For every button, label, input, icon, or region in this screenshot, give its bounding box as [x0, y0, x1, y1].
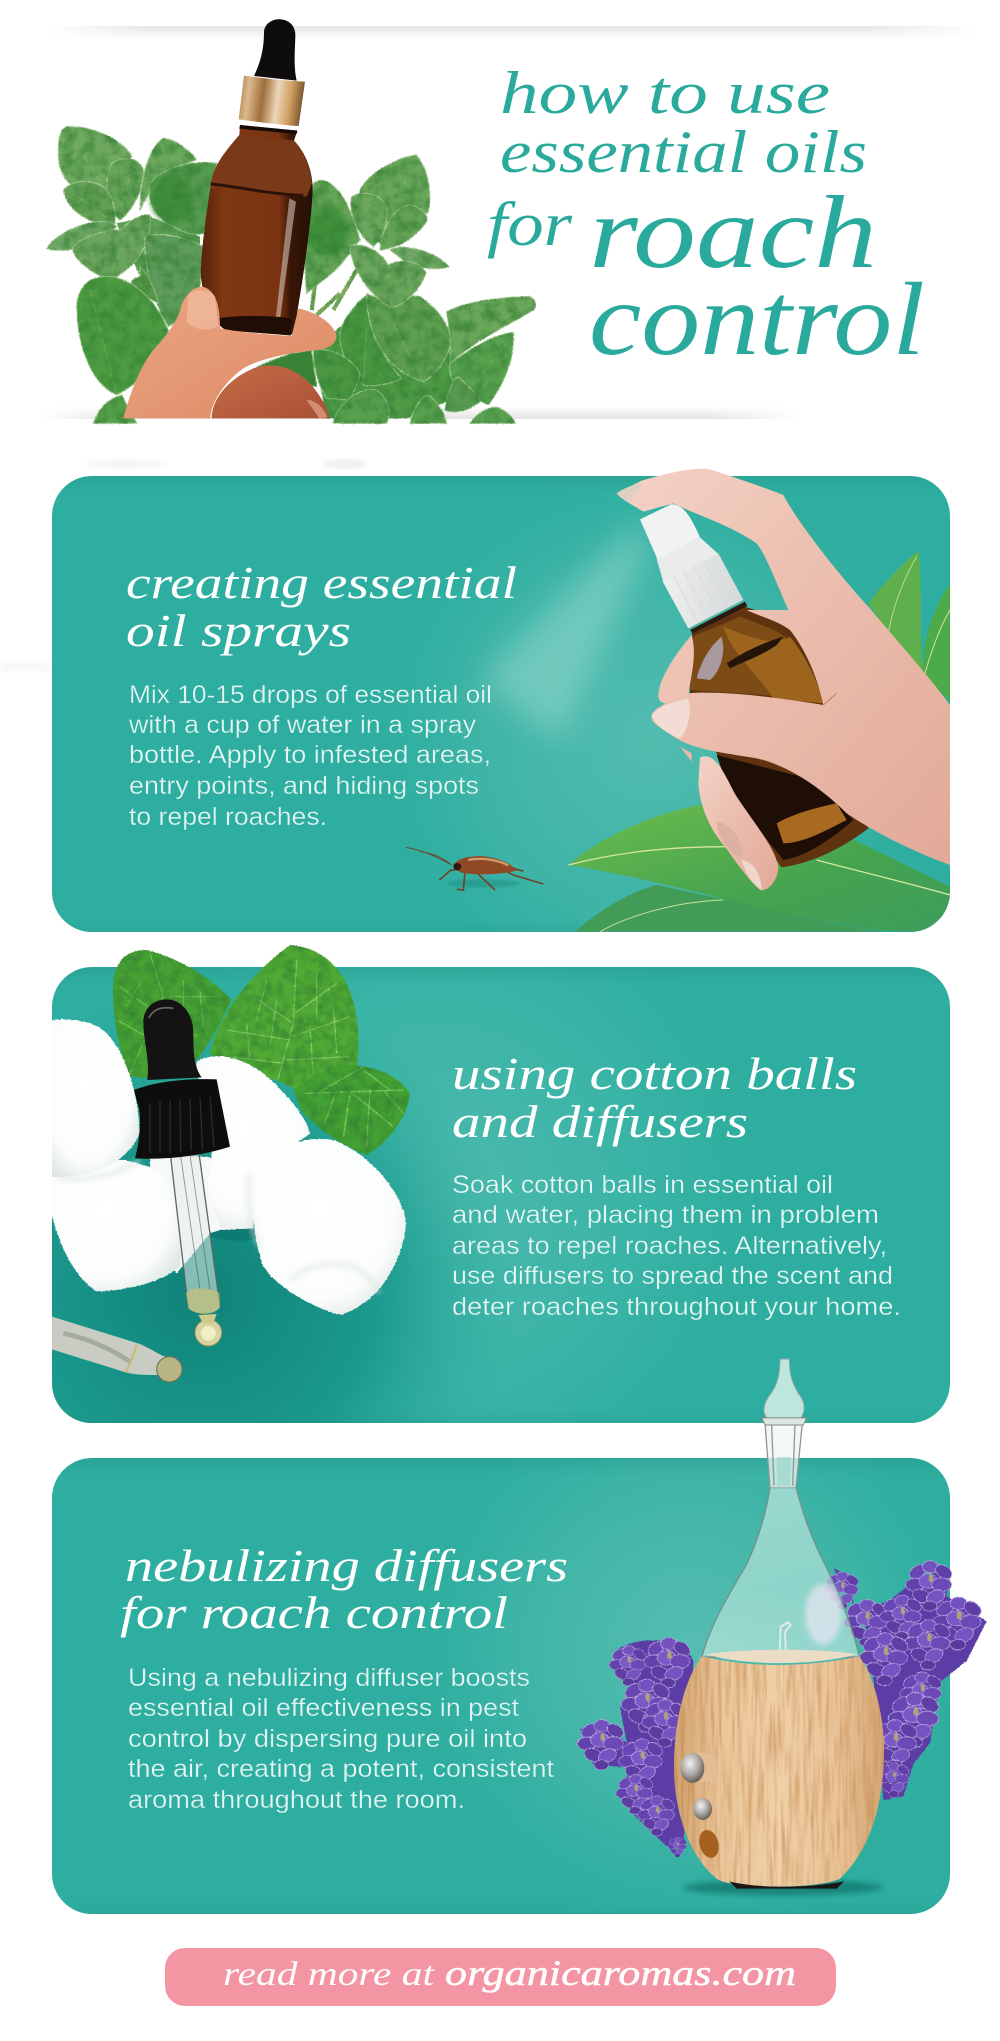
hand [123, 287, 336, 418]
base shadow [683, 1880, 883, 1895]
body text: aroma throughout the room. [128, 1786, 465, 1814]
dial knob [680, 1753, 717, 1783]
amber spray bottle [690, 602, 868, 867]
body text: the air, creating a potent, consistent [128, 1755, 554, 1783]
heading: using cotton balls [452, 1048, 857, 1099]
spray bottle in hand [617, 469, 950, 890]
glass vessel [702, 1359, 859, 1657]
glass tube [171, 1153, 220, 1313]
call to action button [165, 1948, 836, 2006]
footer text: organicaromas.com [445, 1953, 796, 1993]
body text: areas to repel roaches. Alternatively, [452, 1232, 887, 1260]
dropper bulb [254, 19, 297, 81]
button [693, 1798, 712, 1820]
heading: oil sprays [126, 605, 351, 656]
spray mist [480, 520, 650, 740]
black ribbed cap [134, 1079, 230, 1159]
footer text: read more at [223, 1956, 436, 1993]
gold collar [239, 76, 305, 126]
heading [452, 1048, 857, 1147]
vent hole [696, 1827, 722, 1861]
panel background [52, 967, 950, 1423]
heading [120, 1540, 568, 1638]
title [487, 60, 925, 377]
white spray pump [640, 504, 743, 628]
footer text [223, 1953, 796, 1993]
title: for [487, 191, 573, 259]
body text [452, 1171, 901, 1321]
body text: Using a nebulizing diffuser boosts [128, 1664, 530, 1692]
header illustration: oregano leaves, amber bottle and hand [47, 19, 536, 423]
body text: entry points, and hiding spots [129, 772, 479, 800]
body text: Mix 10-15 drops of essential oil [129, 681, 492, 709]
heading: creating essential [126, 557, 517, 608]
panel: creating essential oil sprays [52, 469, 950, 932]
heading: for roach control [120, 1587, 508, 1638]
title: control [589, 262, 925, 377]
body text: control by dispersing pure oil into [128, 1725, 527, 1753]
second dropper [52, 1317, 182, 1382]
panel background [52, 1458, 950, 1914]
bottle [201, 19, 313, 335]
body text: use diffusers to spread the scent and [452, 1262, 893, 1290]
lavender behind diffuser [577, 1561, 987, 1857]
amber glass [201, 125, 313, 335]
panel: using cotton balls and diffusers [50, 945, 950, 1423]
title: roach [589, 175, 877, 290]
heading [126, 557, 517, 656]
panel: nebulizing diffusers for roach control [52, 1359, 987, 1914]
wood base [674, 1656, 884, 1887]
felt foot [729, 1881, 844, 1889]
oregano leaves behind bottle [47, 127, 536, 423]
body text: bottle. Apply to infested areas, [129, 741, 491, 769]
title: how to use [500, 60, 830, 126]
panel background [52, 476, 950, 932]
title: essential oils [500, 119, 867, 185]
mint leaves [113, 945, 410, 1155]
heading: nebulizing diffusers [125, 1540, 568, 1591]
header band shadows [0, 26, 980, 672]
neck [765, 1423, 802, 1487]
body text [128, 1664, 554, 1814]
dropper [134, 999, 230, 1346]
body text: essential oil effectiveness in pest [128, 1694, 519, 1722]
glass rim [706, 1650, 857, 1663]
body text [128, 681, 492, 831]
hand [617, 469, 950, 890]
eucalyptus leaves [568, 551, 950, 932]
rubber bulb [143, 999, 202, 1080]
body text: to repel roaches. [129, 803, 327, 831]
cotton balls [50, 1019, 406, 1315]
heading: and diffusers [452, 1096, 748, 1147]
body text: with a cup of water in a spray [128, 711, 477, 739]
illustration: glass and wood diffuser with lavender [577, 1359, 987, 1895]
stopper tip [764, 1359, 804, 1419]
body text: deter roaches throughout your home. [452, 1293, 901, 1321]
drop [195, 1319, 222, 1346]
icon: cockroach [406, 847, 543, 890]
illustration: mint, cotton balls and dropper [50, 945, 410, 1382]
body text: and water, placing them in problem [452, 1201, 879, 1229]
body text: Soak cotton balls in essential oil [452, 1171, 833, 1199]
